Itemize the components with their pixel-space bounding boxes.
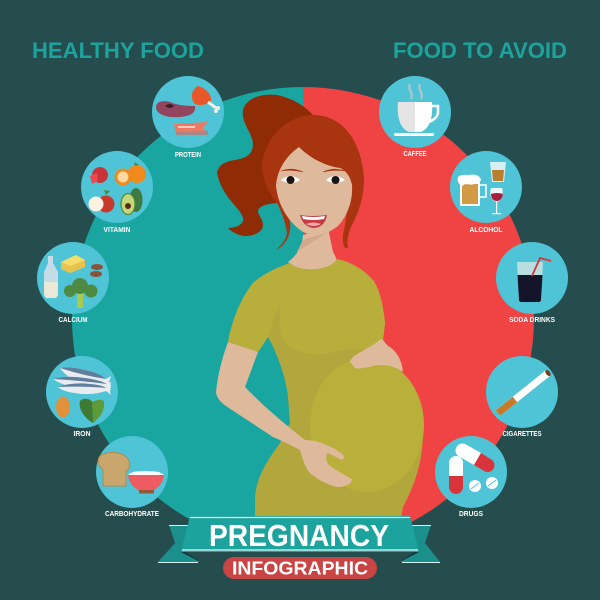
big circle: two halves — [72, 87, 534, 549]
label: drugs: DRUGS — [459, 511, 483, 518]
ponytail hair — [217, 95, 313, 236]
label: protein: PROTEIN — [175, 152, 201, 159]
hair front side strand — [262, 115, 364, 250]
icon: carbohydrate — [96, 436, 168, 518]
label: caffee: CAFFEE — [404, 151, 427, 158]
label: cigarettes: CIGARETTES — [502, 431, 542, 438]
arm lower — [216, 342, 352, 487]
label: carbohydrate: CARBOHYDRATE — [105, 511, 159, 518]
eyes and brows — [281, 169, 345, 184]
icon: drugs — [435, 436, 507, 518]
dress: chest highlight — [278, 259, 385, 354]
label: calcium: CALCIUM — [58, 317, 88, 324]
heading: food to avoid: FOOD TO AVOID — [393, 38, 567, 63]
icon: protein — [152, 76, 224, 159]
belly — [310, 358, 424, 492]
icon: cigarettes — [486, 356, 558, 438]
hand on belly — [350, 339, 403, 372]
banner ribbon — [158, 516, 440, 562]
subtitle pill: INFOGRAPHIC — [232, 558, 368, 578]
ribbon left tail — [158, 525, 200, 562]
icon: calcium — [37, 242, 109, 324]
face — [276, 147, 352, 235]
icon: alcohol — [450, 151, 522, 234]
dress — [228, 259, 423, 522]
label: iron: IRON — [74, 431, 90, 438]
icon: caffee — [379, 76, 451, 158]
icon: vitamin — [81, 151, 153, 234]
heading: healthy food: HEALTHY FOOD — [32, 38, 204, 63]
neck — [288, 228, 337, 272]
title: PREGNANCY — [209, 518, 389, 553]
label: vitamin: VITAMIN — [104, 227, 130, 234]
woman figure — [216, 95, 424, 522]
icon: soda drinks — [496, 242, 568, 324]
label: soda drinks: SODA DRINKS — [509, 317, 555, 324]
ribbon right tail — [400, 525, 440, 562]
mouth — [300, 215, 327, 228]
ribbon main — [181, 516, 419, 552]
icon: iron — [46, 356, 118, 438]
label: alcohol: ALCOHOL — [470, 227, 503, 234]
dress: sleeve — [228, 263, 290, 352]
